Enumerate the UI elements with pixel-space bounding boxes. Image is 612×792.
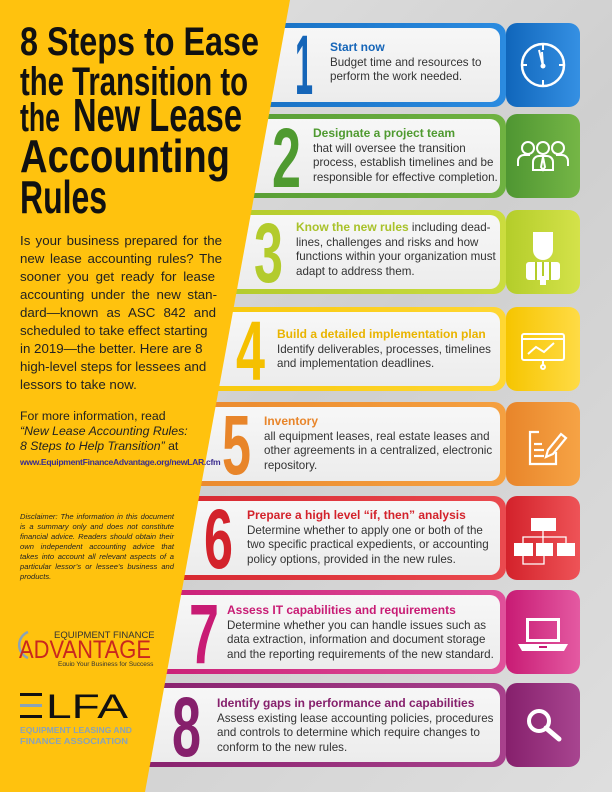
icon box 5 document	[506, 402, 580, 486]
step numbers: 8	[172, 680, 201, 774]
logo: ELFA: EQUIPMENT LEASING AND	[20, 725, 132, 735]
step 5 text: all equipment leases, real estate leases and	[264, 430, 490, 443]
step 5 text: other agreements in a centralized, electronic	[264, 444, 492, 457]
step 7 text: data extraction, information and document storage	[227, 633, 485, 646]
card 6	[120, 496, 506, 580]
intro paragraph: in 2019—the better. Here are 8	[20, 341, 203, 356]
step 8 text: Identify gaps in performance and capabilities	[217, 696, 474, 710]
logo: equipment finance advantage: EQUIPMENT FINANCE	[54, 630, 154, 641]
step numbers: 5	[222, 398, 251, 492]
more info	[20, 409, 220, 467]
intro paragraph: new lease accounting rules? The	[20, 251, 222, 266]
card 8	[120, 683, 506, 767]
step 8 text: conform to the new rules.	[217, 741, 347, 754]
step numbers: 4	[236, 304, 265, 398]
disclaimer: Disclaimer: The information in this document is a summary only and does not constitute financial advice. Readers should obtain their own independent accounting advice that takes into account all relevant aspects of a particular lessor’s or lessee’s business and products.	[20, 512, 174, 581]
step 6 text: Prepare a high level “if, then” analysis	[247, 508, 466, 522]
intro paragraph: sooner you get ready for lease	[20, 269, 215, 284]
step 6 text: two specific practical expedients, or accounting	[247, 538, 489, 551]
step 5 text: repository.	[264, 459, 317, 472]
step 4 text: Identify deliverables, processes, timelines	[277, 343, 491, 356]
step 2 text	[313, 126, 498, 184]
title	[20, 20, 259, 220]
logo: ELFA	[20, 690, 132, 746]
more info: 8 Steps to Help Transition” at	[20, 439, 178, 453]
icon box 1 clock	[506, 23, 580, 107]
step 5 text: Inventory	[264, 414, 318, 428]
title: the	[20, 96, 60, 140]
more info: “New Lease Accounting Rules:	[20, 424, 188, 438]
step 8 text	[217, 696, 493, 754]
step 2 text: process, establish timelines and be	[313, 156, 493, 169]
step 6 text	[247, 508, 489, 566]
step numbers: 6	[204, 492, 233, 586]
intro paragraph	[20, 233, 222, 392]
step 3 text: Know the new rules including dead-	[296, 220, 491, 234]
more info: For more information, read	[20, 409, 166, 423]
card 4	[120, 307, 506, 391]
intro paragraph: accounting under the new stan-	[20, 287, 217, 302]
step 1 text: Budget time and resources to	[330, 56, 481, 69]
card 7	[120, 590, 506, 674]
step 7 text: Assess IT capabilities and requirements	[227, 603, 456, 617]
step 6 text: policy options, provided in the new rules.	[247, 553, 456, 566]
icon box 4 chart	[506, 307, 580, 391]
step 1 text: Start now	[330, 40, 385, 54]
step 3 text: functions within your organization must	[296, 250, 496, 263]
step numbers: 2	[272, 111, 301, 205]
step 3 text: adapt to address them.	[296, 265, 415, 278]
icon box 3 person	[506, 210, 580, 294]
card 5	[120, 402, 506, 486]
logo: ELFA: FINANCE ASSOCIATION	[20, 736, 128, 746]
intro paragraph: high-level steps for lessees and	[20, 359, 206, 374]
step 1 text: perform the work needed.	[330, 70, 462, 83]
step 1 text	[330, 40, 481, 83]
intro paragraph: lessors to take now.	[20, 377, 137, 392]
card 1	[120, 23, 506, 107]
step 8 text: Assess existing lease accounting policies, procedures	[217, 712, 493, 725]
icon box 6 flowchart	[506, 496, 580, 580]
step 4 text: Build a detailed implementation plan	[277, 327, 486, 341]
step 3 text	[296, 220, 496, 278]
step numbers: 7	[189, 587, 219, 681]
icon box 8 magnifier	[506, 683, 580, 767]
title: Accounting	[20, 130, 230, 182]
step 7 text	[227, 603, 494, 661]
step 7 text: and the reporting requirements of the new standard.	[227, 648, 494, 661]
step 8 text: and controls to determine which require changes to	[217, 726, 480, 739]
more info: www.EquipmentFinanceAdvantage.org/newLAR.cfm	[20, 457, 220, 467]
step 4 text: and implementation deadlines.	[277, 357, 434, 370]
icon box 7 laptop	[506, 590, 580, 674]
step 6 text: Determine whether to apply one or both of the	[247, 524, 483, 537]
step 5 text	[264, 414, 492, 472]
step numbers: 3	[254, 206, 283, 300]
step numbers: 1	[295, 18, 313, 112]
icon box 2 team	[506, 114, 580, 198]
step 2 text: Designate a project team	[313, 126, 455, 140]
card 3	[120, 210, 506, 294]
step 4 text	[277, 327, 491, 370]
intro paragraph: dard—known as ASC 842 and	[20, 305, 216, 320]
intro paragraph: Is your business prepared for the	[20, 233, 222, 248]
step 3 text: lines, challenges and risks and how	[296, 236, 478, 249]
intro paragraph: scheduled to take effect starting	[20, 323, 208, 338]
step 7 text: Determine whether you can handle issues such as	[227, 619, 486, 632]
card 2	[120, 114, 506, 198]
step 2 text: responsible for effective completion.	[313, 171, 498, 184]
step 2 text: that will oversee the transition	[313, 142, 466, 155]
